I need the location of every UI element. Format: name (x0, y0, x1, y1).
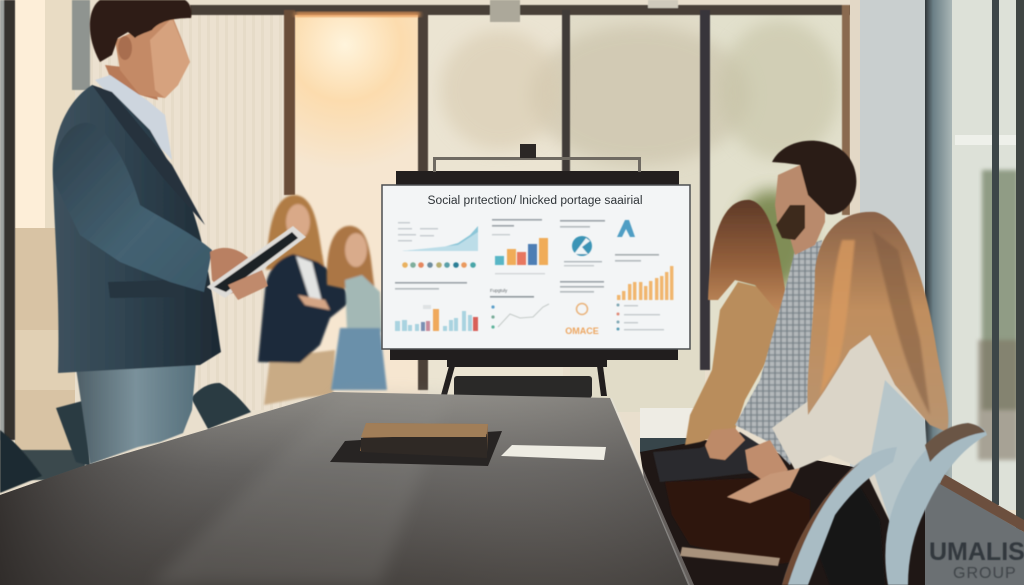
head (115, 15, 190, 98)
screen chart: area chart (398, 222, 478, 268)
watermark: UMALIS GROUP: UMALIS (929, 538, 1024, 566)
front chairs (680, 423, 987, 585)
burgundy trousers (665, 478, 810, 565)
monitor stand and bars (390, 144, 679, 398)
screen chart: line chart: Fupgtuly (490, 288, 508, 293)
screen chart: colour bars (492, 219, 548, 274)
screen chart: line chart (490, 288, 549, 329)
beard (776, 205, 805, 240)
lapel (92, 85, 205, 225)
right wall and glass door (850, 0, 1024, 585)
presenter (53, 0, 306, 464)
audience: man in plaid shirt (653, 141, 856, 482)
hair (772, 141, 856, 214)
neck and face (775, 165, 825, 255)
ear (118, 36, 132, 60)
dark skirt (810, 470, 885, 585)
screen chart: mixed bars (395, 282, 478, 331)
sleeve (53, 123, 212, 292)
plaid shirt (735, 240, 822, 465)
shadow area under the audience seats (640, 440, 925, 585)
blouse (772, 322, 930, 522)
chair two shell (885, 423, 987, 585)
hand and tablet (210, 248, 262, 296)
audience: woman with long blonde hair (665, 212, 948, 585)
chair one shell (782, 447, 897, 585)
hands (745, 440, 788, 482)
screen logo: OMACE: OMACE (565, 326, 599, 336)
pocket (108, 280, 176, 298)
dark trousers (653, 432, 775, 482)
background person: woman in navy blazer (258, 195, 350, 405)
hair (90, 0, 191, 62)
neck (105, 65, 158, 100)
trousers (76, 362, 196, 464)
screen logo: OMACE (560, 281, 604, 336)
long hair (807, 212, 948, 432)
chairs behind table (0, 383, 251, 493)
screen title: Social prıtection/ lnicked portage saairial (428, 195, 642, 207)
screen chart: orange bars (615, 254, 673, 330)
hand (705, 428, 745, 460)
background person: woman in grey top (327, 226, 387, 390)
presentation screen (382, 185, 690, 349)
jacket (53, 85, 221, 373)
screen icon: round logo (560, 220, 605, 266)
watermark: UMALIS GROUP (929, 538, 1024, 582)
watermark: UMALIS GROUP: GROUP (953, 565, 1017, 582)
audience: woman with brown hair (685, 200, 788, 445)
window frames (0, 0, 852, 480)
screen icon: blue A logo (617, 220, 635, 237)
shirt collar (95, 75, 172, 160)
table objects: device box and paper (330, 423, 606, 466)
table (0, 391, 694, 585)
chair bar (680, 547, 780, 566)
